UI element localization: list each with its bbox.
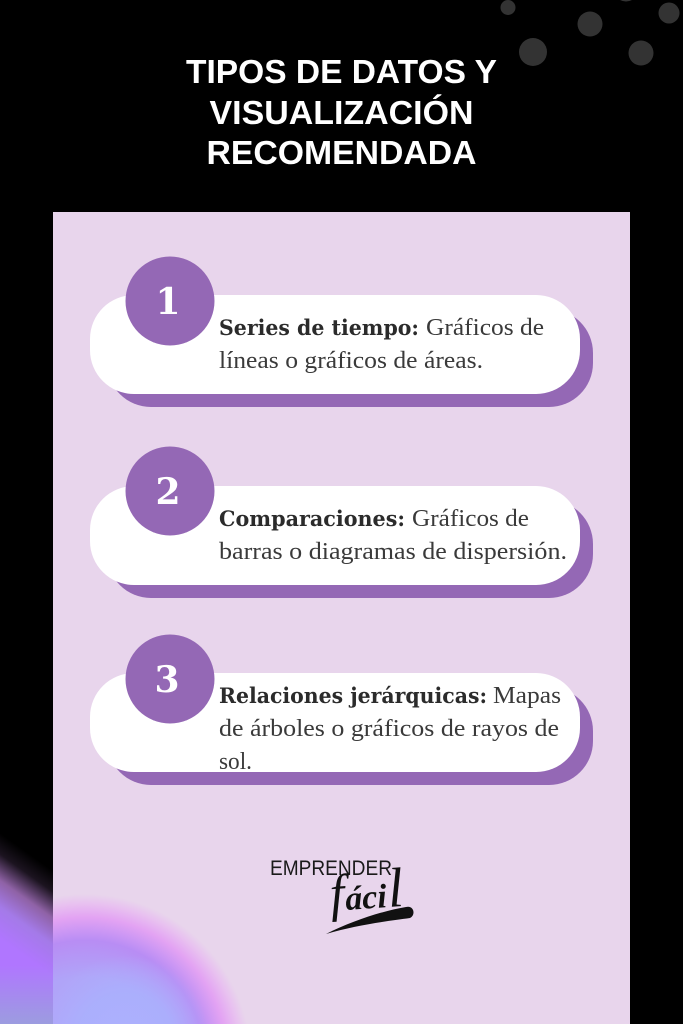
number 3: 3 [154, 659, 180, 701]
card 3 text: Relaciones jerárquicas: [219, 683, 487, 708]
card 2 shadow [107, 500, 593, 598]
logo word facil: áci [344, 878, 389, 918]
logo word facil: l [385, 857, 405, 920]
card 2 text: Gráficos de [412, 506, 529, 532]
number 2: 2 [155, 471, 181, 513]
card 1 text: Series de tiempo: [219, 315, 419, 340]
badge 2 [126, 446, 214, 536]
title: VISUALIZACIÓN [210, 94, 474, 131]
card 2 text: Comparaciones: [219, 506, 405, 531]
logo word emprender: EMPRENDER [270, 857, 392, 880]
card 3 text: sol. [219, 749, 252, 775]
logo [270, 857, 413, 934]
card 2 text: barras o diagramas de dispersión. [219, 539, 567, 565]
card 1 text: líneas o gráficos de áreas. [219, 348, 483, 374]
badge 1 [126, 256, 214, 346]
card 1 shadow [107, 309, 593, 407]
logo word facil: f [328, 865, 353, 923]
card 3 text: de árboles o gráficos de rayos de [219, 716, 559, 742]
card 3 [90, 634, 593, 785]
title [186, 53, 497, 171]
title: RECOMENDADA [206, 134, 476, 171]
gradient blob [0, 820, 278, 1024]
title: TIPOS DE DATOS Y [186, 53, 497, 90]
card 3 shadow [107, 687, 593, 785]
logo swoosh [326, 907, 413, 934]
decorative dots [500, 0, 680, 66]
card 1 [90, 256, 593, 407]
card 3 body [90, 673, 580, 772]
card 2 [90, 446, 593, 598]
panel [53, 212, 630, 1024]
card 2 body [90, 486, 580, 585]
card 3 text: Mapas [493, 683, 561, 709]
card 1 text: Gráficos de [426, 315, 544, 341]
number 1: 1 [155, 281, 181, 323]
badge 3 [126, 634, 214, 724]
card 1 body [90, 295, 580, 394]
